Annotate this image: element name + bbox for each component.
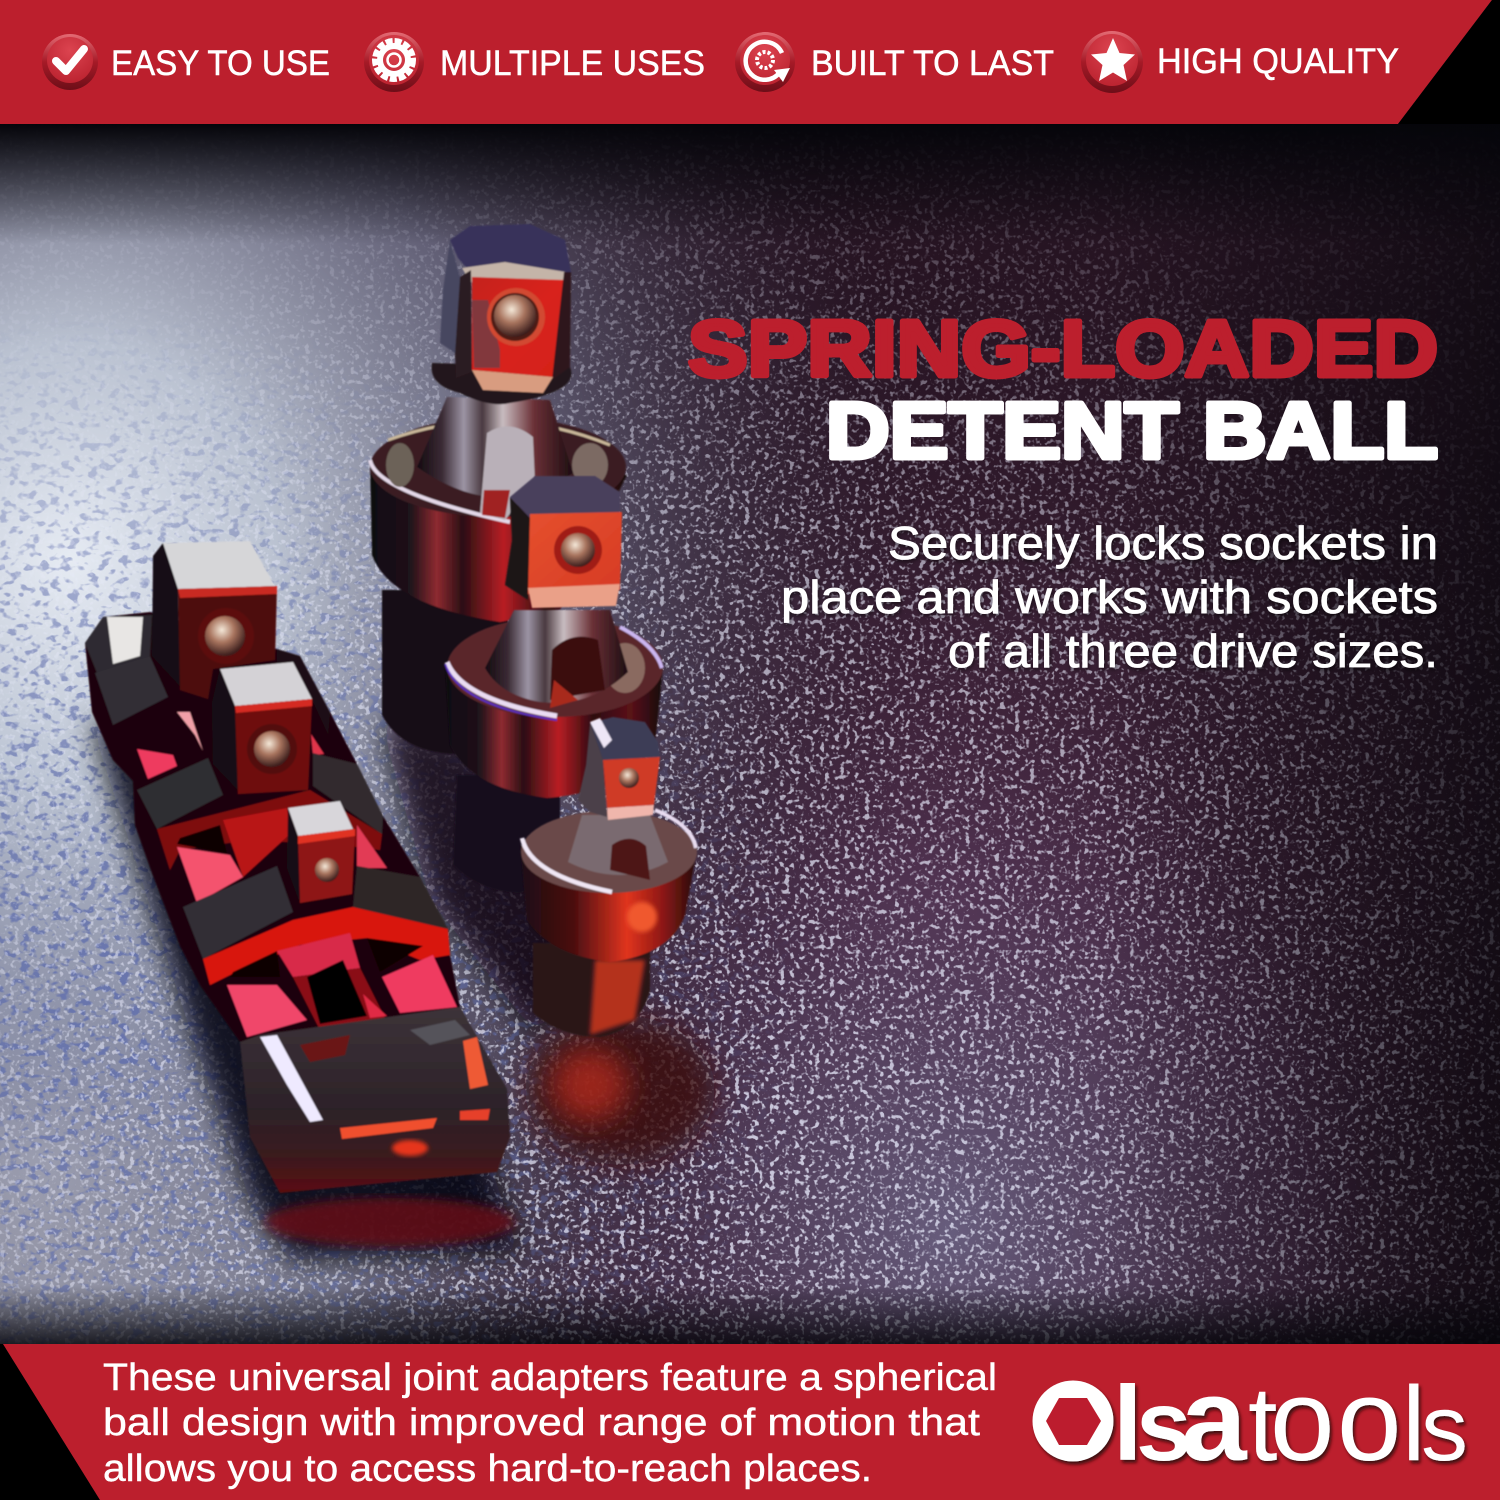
badge: built to last [735, 32, 1054, 92]
badge: high quality [1081, 31, 1399, 93]
badge: easy to use: EASY TO USE [111, 44, 330, 83]
tool: small universal joint [520, 717, 698, 1037]
strip body base [85, 612, 510, 1193]
logo: Olsatools: s [1421, 1375, 1468, 1480]
medium socket upper body [445, 665, 663, 798]
adapter head 1 [152, 541, 277, 699]
logo: Olsatools: o [1337, 1355, 1402, 1485]
logo: Olsatools: t [1248, 1365, 1277, 1483]
small socket upper body [520, 845, 698, 962]
tool: medium universal joint [445, 476, 663, 893]
badge: high quality: HIGH QUALITY [1157, 42, 1399, 81]
medium square head [505, 476, 622, 608]
footer text: allows you to access hard-to-reach places. [103, 1448, 872, 1490]
logo: Olsatools [1032, 1354, 1468, 1486]
description text: Securely locks sockets in [888, 517, 1438, 569]
tool: large universal joint [370, 224, 627, 754]
black rubber bands [85, 615, 448, 959]
description text: place and works with sockets [781, 571, 1438, 623]
badge: multiple uses [364, 32, 705, 92]
adapter head 3 [287, 801, 355, 903]
tool: strip of three adapters [85, 541, 510, 1193]
floor shadows and red reflections [90, 720, 715, 1260]
logo: Olsatools: o [1270, 1355, 1335, 1485]
logo: Olsatools: a [1181, 1354, 1248, 1486]
logo: Olsatools: O [1045, 1379, 1106, 1467]
bottom banner [0, 1344, 1500, 1500]
icon: gear [364, 32, 424, 92]
small socket lower body [533, 943, 650, 1037]
description text: of all three drive sizes. [948, 625, 1438, 677]
logo: Olsatools: l [1402, 1365, 1426, 1483]
small square head [578, 717, 660, 820]
adapter head 2 [212, 662, 312, 794]
small cone [568, 815, 668, 875]
black corner [0, 1344, 100, 1500]
badge: easy to use [42, 34, 330, 90]
icon: star [1081, 31, 1143, 93]
heading: spring-loaded detent ball: SPRING-LOADED [688, 304, 1438, 393]
large collar [432, 363, 571, 404]
footer text: ball design with improved range of motion that [103, 1402, 980, 1444]
logo: Olsatools: l [1113, 1365, 1142, 1483]
icon: check mark [42, 34, 98, 90]
medium cone and knuckle [485, 610, 628, 703]
description text [781, 517, 1438, 677]
logo: Olsatools: s [1136, 1370, 1192, 1482]
medium socket lower body [453, 775, 560, 893]
heading: spring-loaded detent ball: DETENT BALL [826, 386, 1438, 475]
badge: multiple uses: MULTIPLE USES [440, 44, 705, 83]
square drive end block [240, 1007, 510, 1193]
footer text: These universal joint adapters feature a spherical [103, 1357, 997, 1399]
heading: spring-loaded detent ball [688, 304, 1438, 475]
icon: circular arrow [735, 32, 795, 92]
footer text [103, 1357, 997, 1490]
red lit rails [137, 712, 457, 1037]
black corner [1398, 0, 1500, 124]
large cone and knuckle [417, 397, 573, 498]
large socket lower body [382, 590, 510, 754]
top banner [0, 0, 1500, 124]
large socket upper body [370, 460, 627, 622]
photo: socket adapters [85, 224, 715, 1260]
large square head [440, 224, 571, 393]
badge: built to last: BUILT TO LAST [811, 44, 1054, 83]
